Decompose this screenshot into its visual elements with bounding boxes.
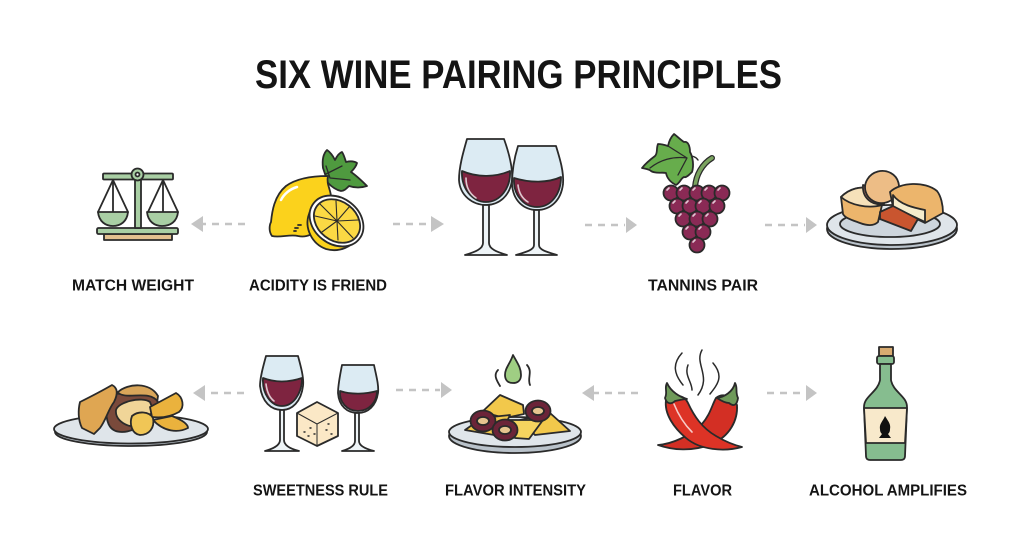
arrow: intensity from flavor	[582, 385, 638, 401]
arrow: grapes to cheese	[765, 217, 817, 233]
icon: glasses and sugar cube	[260, 356, 378, 451]
arrow: glasses to grapes	[585, 217, 637, 233]
icon: lemon	[270, 150, 374, 257]
label: tannins pair: TANNINS PAIR	[648, 278, 758, 294]
label: alcohol amplifies: ALCOHOL AMPLIFIES	[809, 482, 967, 500]
icon: two wine glasses	[459, 139, 563, 255]
icon: grape bunch	[642, 134, 730, 252]
arrow: meat plate from sweetness	[193, 385, 244, 401]
icon: nachos plate with drop	[449, 355, 581, 453]
label: sweetness rule: SWEETNESS RULE	[253, 482, 388, 500]
arrow: scale from lemon	[191, 216, 245, 232]
icon: roast meat and potatoes plate	[54, 385, 208, 446]
label: flavor: FLAVOR	[673, 482, 732, 500]
label: match weight: MATCH WEIGHT	[72, 278, 194, 294]
icon: crossed chili peppers with steam	[658, 350, 742, 450]
title: SIX WINE PAIRING PRINCIPLES	[255, 53, 782, 97]
icon: cheese and bread plate	[827, 167, 957, 249]
arrow: sweetness to intensity	[396, 382, 452, 398]
label: acidity is friend: ACIDITY IS FRIEND	[249, 278, 387, 294]
arrow: lemon to glasses	[393, 216, 444, 232]
arrow: flavor to alcohol	[767, 385, 817, 401]
icon: balance scale	[97, 168, 178, 240]
icon: wine bottle	[864, 347, 907, 460]
label: flavor intensity: FLAVOR INTENSITY	[445, 482, 586, 500]
